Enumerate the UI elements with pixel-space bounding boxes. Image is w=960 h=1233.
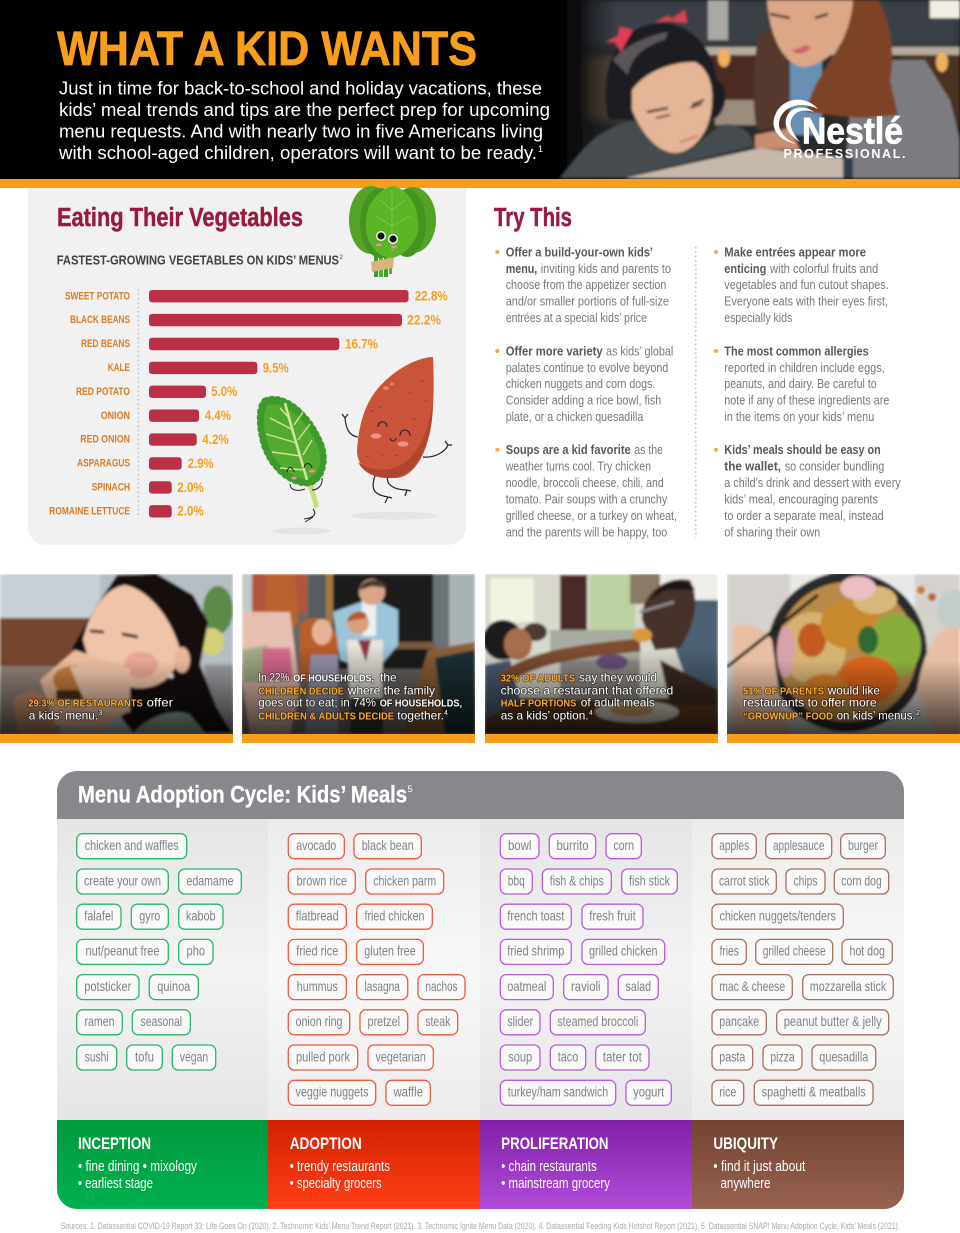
card 2 text: CHILDREN DECIDE [258, 686, 344, 697]
tags: inception: sushi [85, 1049, 109, 1064]
tip: enticing entrees [714, 244, 889, 325]
tags: proliferation: corn [613, 838, 634, 853]
tags: proliferation: tater tot [603, 1049, 642, 1064]
bar chart: 4.4% [205, 408, 231, 423]
stage: inception [78, 1135, 197, 1192]
tip: easy on the wallet: Kids’ meals should be easy on [724, 442, 881, 457]
card 3 text: 32% OF ADULTS [501, 674, 575, 685]
stage: inception: • fine dining • mixology [78, 1158, 197, 1175]
tags: adoption: veggie nuggets [296, 1085, 369, 1100]
card 3 text: say they would [579, 671, 657, 685]
tags: adoption: chicken parm [373, 873, 436, 888]
tags: ubiquity: fries [719, 944, 739, 959]
tags: ubiquity: rice [719, 1085, 737, 1100]
tags: ubiquity [712, 834, 893, 1105]
tags: adoption: onion ring [296, 1014, 342, 1029]
tip: allergies: in the items on your kids’ menu [724, 409, 874, 424]
tip: easy on the wallet [714, 442, 901, 539]
tip: build your own: Offer a build-your-own kids’ [506, 244, 653, 259]
tip: easy on the wallet: a child’s drink and dessert with every [724, 475, 901, 490]
photo card 3: adults [483, 574, 718, 743]
stage: proliferation: PROLIFERATION [501, 1135, 608, 1153]
tags: inception [77, 834, 241, 1070]
card 1 text [28, 696, 173, 722]
stage band [57, 1120, 904, 1209]
card 1 text: a kids’ menu. [29, 708, 98, 722]
card 2 text: goes out to eat; in 74% [258, 696, 376, 710]
tip: allergies: reported in children include eggs, [724, 360, 885, 375]
card 4 text: on kids’ menus. [837, 708, 916, 722]
girl [560, 121, 754, 178]
card 3 text: as a kids’ option. [501, 708, 589, 722]
tip: easy on the wallet: the wallet, [724, 458, 781, 474]
card 4 text [743, 683, 920, 722]
tip: soups: Soups are a kid favorite [506, 442, 631, 457]
tip: easy on the wallet: of sharing their own [724, 524, 820, 539]
logo: Nestle Professional: PROFESSIONAL. [784, 147, 906, 161]
tags: proliferation: turkey/ham sandwich [508, 1085, 608, 1100]
card 3 text: 4 [589, 710, 593, 717]
tags: inception: potsticker [84, 979, 132, 994]
tags: adoption: pulled pork [296, 1049, 350, 1064]
icon: spinach character [349, 186, 436, 277]
woman [845, 60, 960, 178]
tags: inception: pho [187, 944, 205, 959]
icon: kale character [259, 398, 331, 534]
card 2 text: where the family [347, 683, 435, 697]
tags: adoption: fried chicken [364, 908, 424, 924]
bar chart: 2.0% [177, 480, 204, 495]
intro text: with school-aged children, operators will want to be ready. [58, 142, 537, 163]
card 4 text: restaurants to offer more [743, 696, 877, 710]
tip: easy on the wallet: so consider bundling [785, 458, 884, 474]
tags: proliferation: fried shrimp [507, 944, 565, 959]
tags: proliferation: fish stick [629, 873, 670, 888]
stage: proliferation: • mainstream grocery [501, 1175, 610, 1192]
header photo: girl and mother [558, 0, 960, 179]
tip: enticing entrees: enticing [724, 261, 766, 276]
tip: soups: grilled cheese, or a turkey on wheat, [506, 508, 677, 523]
header band [0, 0, 960, 179]
stage: adoption [290, 1135, 390, 1192]
tags: ubiquity: pasta [719, 1049, 746, 1064]
tip: allergies: peanuts, and dairy. Be careful to [724, 376, 877, 391]
tip: allergies [714, 343, 889, 424]
tags: ubiquity: applesauce [773, 838, 825, 853]
card 2 text: together. [397, 708, 444, 722]
tip: build your own: inviting kids and parents to [541, 261, 671, 276]
tags: adoption: flatbread [296, 908, 339, 924]
tags: proliferation: fresh fruit [589, 908, 636, 924]
stage: proliferation [501, 1135, 610, 1192]
card 2 text: OF HOUSEHOLDS, [380, 699, 462, 710]
card 3 text: choose a restaurant that offered [501, 683, 673, 697]
tip: allergies: note if any of these ingredients are [724, 393, 889, 408]
tags: proliferation: soup [508, 1049, 532, 1064]
card 4 text: “GROWNUP” FOOD [743, 711, 833, 722]
card 3 text: of adult meals [581, 696, 655, 710]
tags: proliferation: oatmeal [507, 979, 546, 994]
tip: enticing entrees: Make entrées appear more [724, 244, 866, 259]
tags: proliferation: grilled chicken [589, 944, 658, 959]
photo card 1: restaurants [0, 574, 233, 743]
tags: adoption: brown rice [297, 873, 347, 888]
card 2 text [258, 671, 462, 722]
tags: proliferation: salad [626, 979, 651, 994]
intro text: kids’ meal trends and tips are the perfect prep for upcoming [59, 99, 550, 120]
card 2 text: the [380, 671, 397, 685]
tip: more variety: Consider adding a rice bowl, fish [506, 393, 661, 408]
bar chart: RED ONION [80, 434, 130, 446]
tip: build your own: menu, [506, 261, 537, 276]
bar chart: 2.0% [177, 504, 204, 519]
bar chart: ROMAINE LETTUCE [49, 505, 130, 517]
tags: ubiquity: corn dog [841, 873, 882, 888]
tip: enticing entrees: with colorful fruits and [769, 261, 878, 276]
title: WHAT A KID WANTS [57, 23, 477, 76]
intro text: Just in time for back-to-school and holiday vacations, these [59, 78, 542, 98]
tags: adoption: steak [425, 1014, 450, 1029]
card 2 text: In 22% [258, 671, 290, 685]
logo: Nestle Professional [773, 100, 906, 161]
tip: soups [495, 442, 677, 539]
tip: more variety: chicken nuggets and corn dogs. [506, 376, 655, 391]
header bar: 5 [408, 784, 413, 794]
tip: more variety [495, 343, 673, 424]
stage: inception: INCEPTION [78, 1135, 151, 1153]
tags: adoption: fried rice [296, 944, 339, 959]
subheading: chart title: FASTEST-GROWING VEGETABLES ON KIDS’ MENUS [57, 252, 339, 267]
stage: proliferation: • chain restaurants [501, 1158, 597, 1175]
tip: build your own [495, 244, 671, 325]
tags: adoption: pretzel [368, 1014, 400, 1029]
tags: inception: falafel [84, 908, 113, 924]
dotted column divider [695, 247, 697, 538]
tags: ubiquity: hot dog [849, 944, 885, 959]
tip: allergies: The most common allergies [724, 343, 869, 358]
tags: proliferation: taco [558, 1049, 579, 1064]
tags: inception: chicken and waffles [85, 838, 179, 853]
tags: proliferation: bowl [508, 838, 531, 853]
card 2 text: 4 [444, 710, 448, 717]
stage: adoption: • trendy restaurants [290, 1158, 390, 1175]
tags: proliferation: ravioli [571, 979, 601, 994]
tip: soups: tomato. Pair soups with a crunchy [506, 491, 668, 506]
subheading: chart title: 2 [340, 255, 344, 261]
stage: ubiquity: UBIQUITY [713, 1135, 778, 1153]
tags: inception: vegan [180, 1049, 208, 1064]
card 1 text: offer [147, 696, 173, 710]
bar chart: RED POTATO [76, 386, 130, 398]
tags: ubiquity: grilled cheese [763, 944, 826, 959]
stage: ubiquity: • find it just about [713, 1158, 806, 1175]
bar chart: 4.2% [202, 432, 229, 447]
tags: inception: quinoa [157, 979, 191, 994]
bar chart: SWEET POTATO [65, 290, 130, 302]
tags: proliferation: burrito [556, 838, 589, 853]
tags: proliferation: yogurt [633, 1085, 664, 1100]
card 4 text: 2 [916, 710, 920, 717]
tip: more variety: Offer more variety [506, 343, 603, 358]
card 2 text: CHILDREN & ADULTS DECIDE [258, 711, 394, 722]
tags: proliferation: slider [507, 1014, 534, 1029]
tags: adoption: nachos [426, 979, 458, 994]
dotted axis [137, 289, 139, 518]
panel: try this [494, 204, 901, 539]
bar chart: 2.9% [188, 456, 214, 471]
bar chart: BLACK BEANS [70, 314, 130, 326]
tags: proliferation: fish & chips [550, 873, 604, 888]
card 3 text: HALF PORTIONS [501, 699, 576, 710]
intro text: menu requests. And with nearly two in five Americans living [59, 120, 543, 142]
tags: ubiquity: pancake [719, 1014, 759, 1029]
bar chart: 9.5% [263, 360, 289, 375]
tip: build your own: entrées at a special kids’ price [506, 310, 647, 325]
tags: inception: gyro [139, 908, 161, 924]
intro text [58, 78, 550, 163]
tags: ubiquity: chips [794, 873, 818, 888]
tags: ubiquity: carrot stick [719, 873, 770, 888]
panel: menu adoption cycle [57, 771, 904, 1209]
stage: ubiquity: anywhere [720, 1175, 770, 1192]
tags: proliferation: steamed broccoli [557, 1014, 638, 1029]
bar chart: ONION [101, 410, 130, 422]
intro text: 1 [538, 144, 543, 154]
tags: adoption: gluten free [364, 944, 416, 959]
photo card 2: households [242, 574, 475, 743]
header bar: Menu Adoption Cycle: Kids’ Meals [78, 782, 407, 808]
tags: ubiquity: chicken nuggets/tenders [719, 908, 836, 924]
tags: ubiquity: peanut butter & jelly [784, 1014, 882, 1029]
tags: ubiquity: apples [719, 838, 749, 853]
card 1 text: 29.3% OF RESTAURANTS [28, 699, 143, 710]
tags: adoption: avocado [296, 838, 337, 853]
tags: inception: ramen [84, 1014, 114, 1029]
tags: adoption: waffle [393, 1085, 423, 1100]
stage: adoption: ADOPTION [290, 1135, 362, 1153]
bar chart [49, 289, 448, 519]
tip: easy on the wallet: to order a separate meal, instead [724, 508, 884, 523]
tags: ubiquity: burger [848, 838, 878, 853]
tags: adoption: lasagna [364, 979, 400, 994]
tags: adoption [288, 834, 465, 1105]
bar chart: RED BEANS [81, 338, 130, 350]
tags: ubiquity: quesadilla [819, 1049, 869, 1064]
tags: adoption: black bean [362, 838, 414, 853]
tip: more variety: as kids’ global [606, 343, 673, 358]
bar chart: 22.8% [415, 289, 448, 304]
tags: inception: edamame [186, 873, 234, 888]
tip: more variety: palates continue to evolve beyond [506, 360, 668, 375]
bar chart: SPINACH [92, 482, 130, 494]
tags: adoption: vegetarian [375, 1049, 426, 1064]
logo: Nestle Professional: Nestlé [802, 110, 903, 152]
tags: inception: create your own [84, 873, 161, 888]
tags: ubiquity: mozzarella stick [810, 979, 886, 994]
heading: try this: Try This [494, 204, 572, 232]
tip: build your own: choose from the appetizer section [506, 277, 666, 292]
bar chart: ASPARAGUS [77, 458, 130, 470]
bar chart: 22.2% [407, 312, 441, 328]
tags: proliferation [500, 834, 677, 1105]
header bar [57, 771, 904, 819]
card 4 text: 51% OF PARENTS [743, 686, 824, 697]
card 3 text [501, 671, 673, 722]
tip: enticing entrees: especially kids [724, 310, 793, 325]
tags: ubiquity: spaghetti & meatballs [762, 1085, 866, 1100]
tags: proliferation: bbq [508, 873, 525, 888]
tip: soups: and the parents will be happy, too [506, 524, 667, 539]
tip: more variety: plate, or a chicken quesadilla [506, 409, 644, 424]
stage: inception: • earliest stage [78, 1175, 153, 1192]
tip: soups: weather turns cool. Try chicken [505, 458, 651, 474]
tags: ubiquity: pizza [770, 1049, 795, 1064]
tip: enticing entrees: vegetables and fun cutout shapes. [724, 277, 889, 292]
card 2 text: OF HOUSEHOLDS, [293, 674, 374, 685]
tip: soups: as the [634, 442, 663, 457]
bar chart: 5.0% [211, 384, 237, 399]
tags: ubiquity: mac & cheese [719, 979, 785, 994]
paper [625, 148, 843, 178]
stage: adoption: • specialty grocers [290, 1175, 382, 1192]
panel: eating their vegetables [28, 186, 466, 545]
tags: inception: kabob [186, 908, 216, 924]
card 4 text: would like [827, 683, 880, 697]
tags: inception: tofu [135, 1049, 154, 1064]
tip: build your own: and/or smaller portions of full-size [506, 294, 669, 309]
tip: easy on the wallet: kids’ meal, encouraging parents [724, 491, 878, 506]
heading: eating their vegetables: Eating Their Vegetables [57, 204, 303, 232]
icon: sweet potato character [342, 357, 452, 520]
tags: inception: seasonal [141, 1014, 182, 1029]
tags: proliferation: french toast [507, 908, 564, 924]
orange divider [0, 179, 960, 188]
tip: soups: noodle, broccoli cheese, chili, and [506, 475, 664, 490]
bar chart: KALE [108, 362, 130, 374]
bar chart: 16.7% [345, 336, 378, 351]
card 1 text: 3 [98, 710, 102, 717]
tip: enticing entrees: Everyone eats with their eyes first, [724, 294, 888, 309]
tags: adoption: hummus [297, 979, 338, 994]
stage: ubiquity [713, 1135, 806, 1192]
photo card 4: parents [727, 572, 960, 743]
tags: inception: nut/peanut free [86, 944, 160, 959]
